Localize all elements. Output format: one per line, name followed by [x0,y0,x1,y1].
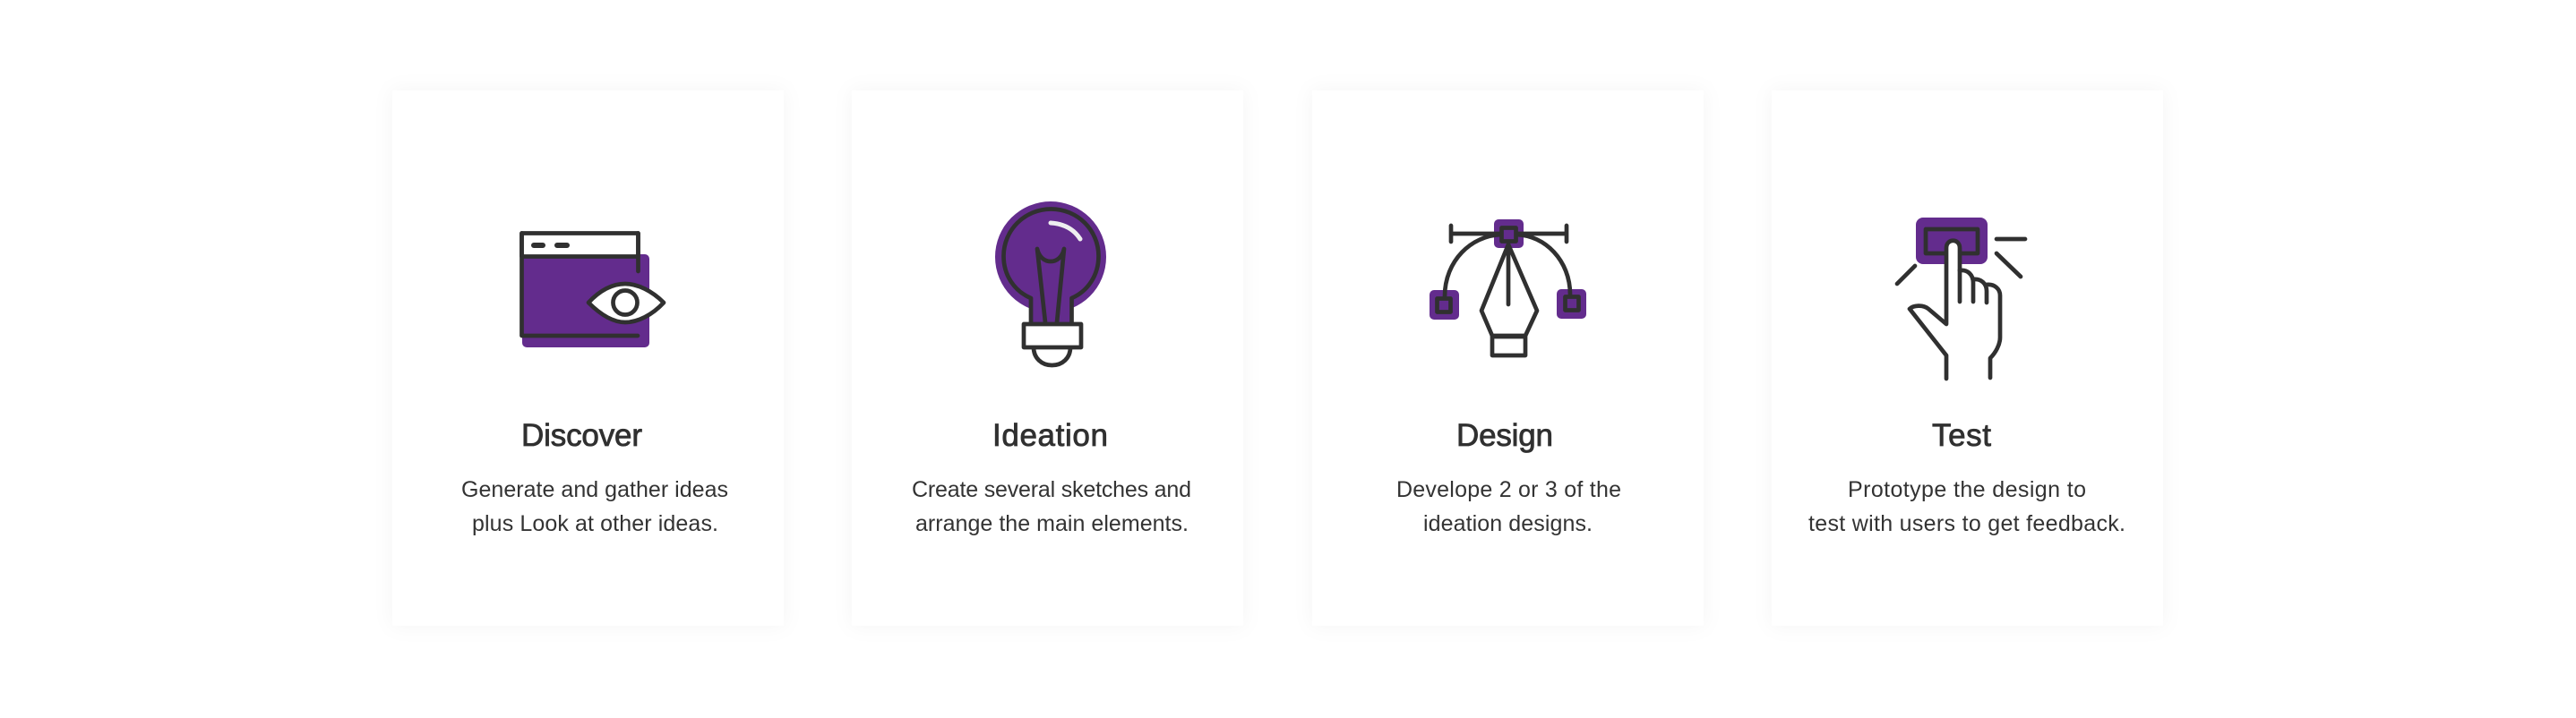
heading: design: Design [1456,418,1553,453]
heading: ideation: Ideation [992,418,1108,453]
panel: design [1312,90,1704,626]
description: design: ideation designs. [1423,511,1593,536]
description: test: Prototype the design to [1848,477,2086,502]
icon: finger pressing button [1897,218,2025,379]
panel: discover [392,90,784,626]
description: discover: Generate and gather ideas [461,477,728,502]
heading: test: Test [1932,418,1991,453]
card background: ideation [852,90,1243,626]
card background: design [1312,90,1704,626]
panel: ideation [852,90,1243,626]
heading: discover: Discover [521,418,642,453]
description: design: Develope 2 or 3 of the [1396,477,1621,502]
description: ideation: Create several sketches and [912,477,1191,502]
description: ideation: arrange the main elements. [915,511,1189,536]
description: discover: plus Look at other ideas. [472,511,718,536]
icon: light bulb [995,201,1106,365]
panel: test [1772,90,2163,626]
description: ideation [912,477,1191,536]
icon: browser window with eye [521,233,664,347]
description: test [1808,477,2125,536]
description: test: test with users to get feedback. [1808,511,2125,536]
description: design [1396,477,1621,536]
icon: pen tool [1430,219,1586,355]
description: discover [461,477,728,536]
card background: discover [392,90,784,626]
card background: test [1772,90,2163,626]
